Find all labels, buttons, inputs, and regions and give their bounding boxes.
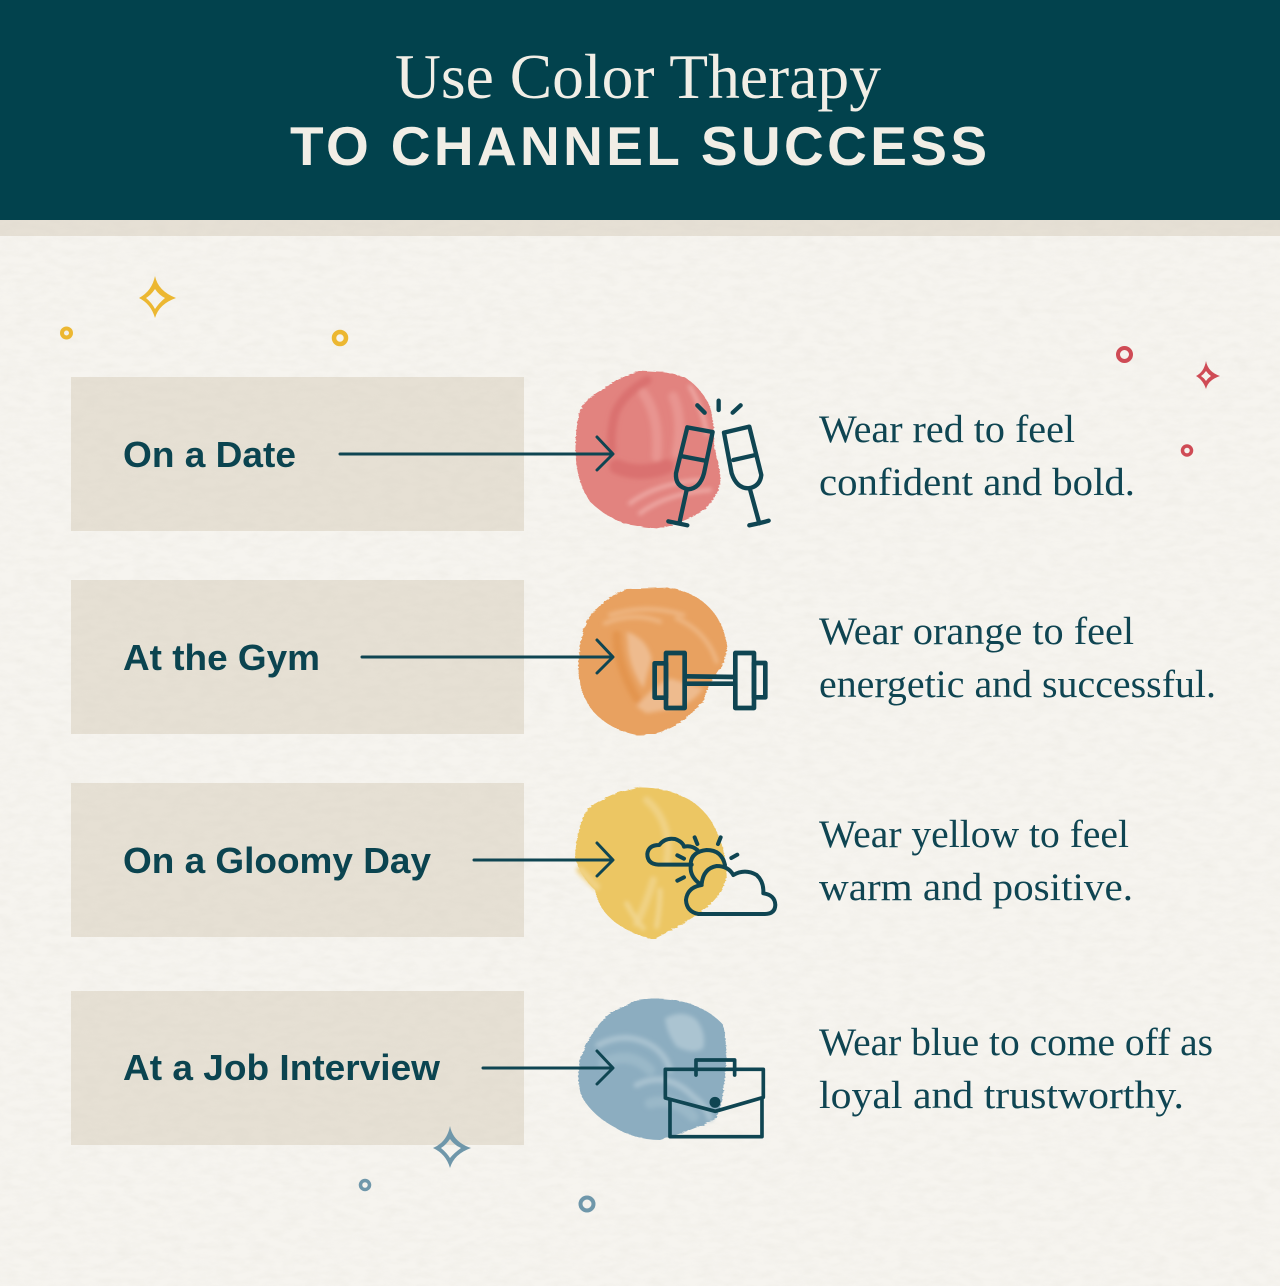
text: orange	[819, 610, 1216, 706]
icon: briefcase	[665, 1060, 763, 1137]
text: red	[819, 408, 1135, 504]
panel: label boxes	[71, 377, 524, 1145]
arrow: job interview	[483, 1051, 613, 1084]
icon: sun and clouds	[647, 837, 775, 914]
text: blue: loyal and trustworthy.	[819, 1074, 1184, 1117]
text: orange: Wear orange to feel	[819, 610, 1134, 653]
title: Use Color Therapy	[395, 42, 881, 112]
text: orange: energetic and successful.	[819, 663, 1216, 706]
header band	[0, 0, 1280, 236]
text: red: confident and bold.	[819, 461, 1135, 504]
text: red: Wear red to feel	[819, 408, 1075, 451]
title: TO CHANNEL SUCCESS	[290, 115, 987, 177]
icon: dumbbell	[655, 653, 765, 708]
text: yellow: warm and positive.	[819, 866, 1133, 909]
arrow: gym	[362, 640, 613, 673]
label: On a Gloomy Day: On a Gloomy Day	[123, 840, 431, 881]
paint blob: orange	[578, 588, 727, 735]
text: blue: Wear blue to come off as	[819, 1021, 1213, 1064]
label: At the Gym: At the Gym	[123, 637, 320, 678]
icon: champagne glasses	[668, 401, 769, 525]
decoration: blue sparkles	[360, 1126, 594, 1210]
decoration: yellow sparkles	[62, 276, 346, 344]
label: At a Job Interview: At a Job Interview	[123, 1047, 441, 1088]
decoration: red sparkles	[1118, 348, 1220, 455]
label: On a Date: On a Date	[123, 434, 296, 475]
title	[290, 42, 987, 177]
paint blob: yellow	[575, 787, 727, 939]
paint blob: blue	[578, 998, 726, 1140]
text: blue	[819, 1021, 1213, 1117]
text: yellow: Wear yellow to feel	[819, 813, 1129, 856]
arrow: gloomy day	[474, 843, 613, 876]
paint blob: red	[575, 371, 721, 528]
arrow: date	[340, 437, 613, 470]
text: yellow	[819, 813, 1133, 909]
